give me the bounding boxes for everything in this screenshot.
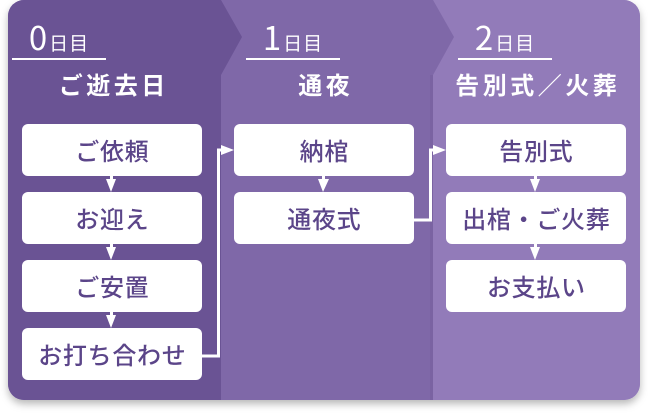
step: お迎え [22,192,202,244]
step: 告別式: 告別式 [499,132,573,167]
step: 通夜式 [234,192,414,244]
arrow: 出棺 to お支払い [530,244,540,260]
day label: 2日目: 2日目 [475,12,535,60]
day label: 1日目 [246,20,340,60]
arrow: 告別式 to 出棺 [530,176,540,192]
day label: 0日目: 0日目 [29,12,89,60]
step: お迎え: お迎え [75,200,149,235]
step: 告別式 [446,124,626,176]
day label: 2日目 [458,20,552,60]
step: ご依頼: ご依頼 [75,132,149,167]
step: ご依頼 [22,124,202,176]
step: 納棺 [234,124,414,176]
step: ご安置 [22,260,202,312]
day label: 1日目: 1日目 [263,12,323,60]
step: 出棺・ご火葬: 出棺・ご火葬 [462,200,610,235]
heading: 告別式/火葬: 告別式／火葬 [455,66,620,101]
heading: ご逝去日: ご逝去日 [59,66,169,101]
step: 通夜式: 通夜式 [287,200,361,235]
step: お打ち合わせ: お打ち合わせ [38,336,186,371]
connector: day 1 to day 2 [414,145,446,220]
day label: 0日目 [12,20,106,60]
arrow: お迎え to ご安置 [106,244,116,260]
step: ご安置: ご安置 [75,268,149,303]
step: 納棺: 納棺 [300,132,349,167]
connector: day 0 to day 1 [202,145,234,356]
step: お支払い [446,260,626,312]
step: 出棺・ご火葬 [446,192,626,244]
heading: 通夜: 通夜 [298,66,353,101]
step: お打ち合わせ [22,328,202,380]
arrow: 納棺 to 通夜式 [318,176,329,192]
arrow: ご安置 to お打ち合わせ [106,312,116,328]
arrow: ご依頼 to お迎え [106,176,116,192]
step: お支払い: お支払い [487,268,586,303]
